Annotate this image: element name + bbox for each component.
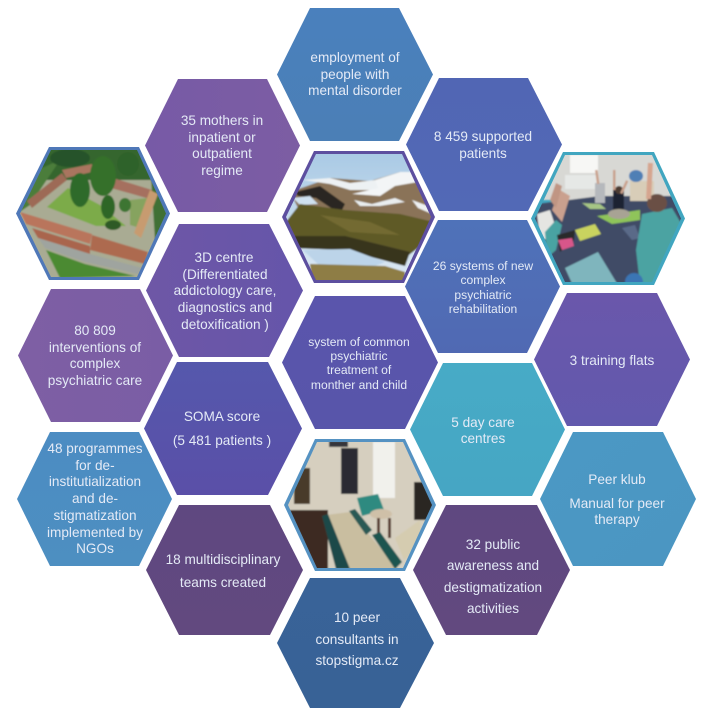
hexagon: 35 mothers: inpatient or [188, 130, 256, 145]
hexagon: employment: people with [321, 67, 389, 82]
hexagon: 3D centre: (Differentiated [182, 267, 268, 282]
hexagon: 35 mothers [145, 79, 300, 212]
hexagon: public awareness [413, 505, 570, 635]
hexagon: day care centres: centres [461, 431, 505, 446]
hexagon: NGO programmes: and de- [72, 491, 118, 506]
hexagon: interventions: psychiatric care [48, 373, 142, 388]
hexagon: peer consultants: stopstigma.cz [315, 653, 399, 668]
hexagon: supported patients: patients [459, 146, 507, 161]
hexagon: 26 systems: 26 systems of new [433, 259, 533, 273]
photo hexagon: hospital aerial view [15, 145, 175, 285]
hexagon: public awareness: activities [467, 601, 519, 616]
hexagon: 35 mothers: regime [201, 163, 243, 178]
hexagon: 3D centre: diagnostics and [178, 300, 272, 315]
hexagon: NGO programmes: for de- [75, 458, 115, 473]
hexagon: interventions: complex [70, 356, 121, 371]
hexagon: employment: mental disorder [308, 83, 402, 98]
hexagon: day care centres [410, 363, 565, 496]
hexagon: 35 mothers: 35 mothers in [181, 113, 263, 128]
hexagon: 26 systems: psychiatric [454, 288, 512, 302]
hexagon: public awareness: destigmatization [444, 580, 542, 595]
hexagon: supported patients [406, 78, 562, 211]
hexagon: interventions: 80 809 [74, 323, 116, 338]
hexagon: NGO programmes: institutialization [49, 474, 141, 489]
hexagon: NGO programmes: NGOs [76, 541, 114, 556]
hexagon: day care centres: 5 day care [451, 415, 515, 430]
hexagon: mother and child treatment: psychiatric [330, 349, 388, 363]
hexagon: employment [277, 8, 433, 141]
hexagon: peer club: Peer klub [588, 472, 646, 487]
hexagon: 26 systems: rehabilitation [449, 302, 517, 316]
hexagon: SOMA score [144, 362, 302, 495]
hexagon: peer consultants: 10 peer [334, 610, 381, 625]
hexagon: mother and child treatment [282, 296, 438, 429]
hexagon: interventions: interventions of [49, 340, 141, 355]
hexagon: multidisciplinary teams: teams created [180, 575, 266, 590]
hexagon: interventions [18, 289, 173, 422]
hexagon: training flats [534, 293, 690, 426]
photo hexagon: mountain landscape [282, 150, 437, 285]
hexagon: peer club [540, 432, 696, 566]
hexagon: employment: employment of [310, 50, 400, 65]
hexagon: peer club: Manual for peer [569, 496, 665, 511]
hexagon: SOMA score: SOMA score [184, 409, 260, 424]
hexagon: multidisciplinary teams [146, 505, 303, 635]
hexagon: supported patients: 8 459 supported [434, 129, 532, 144]
hexagon: 26 systems [405, 220, 560, 353]
hexagon: public awareness: 32 public [466, 537, 520, 552]
photo hexagon: yoga group [530, 150, 688, 291]
hexagon: mother and child treatment: monther and child [311, 378, 407, 392]
hexagon: public awareness: awareness and [447, 558, 539, 573]
hexagon: 3D centre: detoxification ) [181, 317, 269, 332]
photo hexagon: meeting room [284, 438, 438, 575]
hexagon: NGO programmes: 48 programmes [47, 441, 143, 456]
hexagon: 35 mothers: outpatient [192, 146, 252, 161]
hexagon: 3D centre [146, 224, 303, 357]
hexagon: NGO programmes: stigmatization [53, 508, 137, 523]
hexagon: 3D centre: 3D centre [195, 250, 253, 265]
hexagon: training flats: 3 training flats [570, 353, 655, 368]
hexagon: mother and child treatment: system of common [308, 335, 410, 349]
hexagon: SOMA score: (5 481 patients ) [173, 433, 271, 448]
hexagon: peer club: therapy [594, 512, 640, 527]
hexagon: peer consultants: consultants in [315, 632, 399, 647]
hexagon: NGO programmes: implemented by [47, 525, 143, 540]
hexagon: mother and child treatment: treatment of [327, 363, 392, 377]
hexagon: 26 systems: complex [460, 273, 506, 287]
hexagon: multidisciplinary teams: 18 multidisciplinary [166, 552, 281, 567]
hexagon: NGO programmes [17, 432, 172, 566]
hexagon: peer consultants [277, 578, 434, 708]
hexagon: 3D centre: addictology care, [174, 283, 276, 298]
